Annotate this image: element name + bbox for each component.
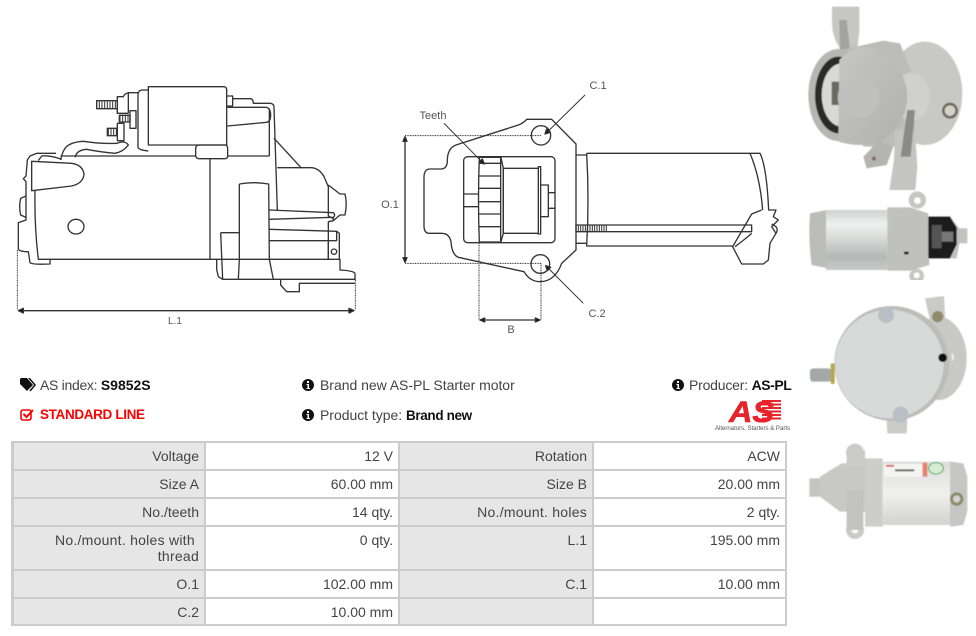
photo: starter front end view: [808, 6, 963, 190]
row: C.2: [14, 599, 785, 624]
info: producer: Producer: AS-PL: [689, 377, 791, 393]
icon: info: [672, 379, 684, 391]
diagram: starter motor front view: [381, 80, 779, 336]
icon: info: [302, 409, 314, 421]
row: threaded holes / L.1: [14, 527, 785, 569]
row: size A / size B: 60.00 mm: [331, 476, 393, 492]
row: voltage / rotation: [14, 443, 785, 469]
icon: info: [302, 379, 314, 391]
row: size A / size B: Size A: [159, 476, 199, 492]
info: brand new: Brand new AS-PL Starter motor: [320, 377, 515, 393]
diagram: starter motor front view: B: [507, 324, 515, 336]
row: O.1 / C.1: [14, 571, 785, 597]
diagram: starter motor front view: C.1: [589, 80, 607, 92]
row: voltage / rotation: Voltage: [152, 448, 199, 464]
row: teeth / mounting holes: No./mount. holes: [477, 504, 587, 520]
row: size A / size B: Size B: [547, 476, 587, 492]
row: threaded holes / L.1: thread: [158, 548, 199, 564]
diagram: starter motor side view: L.1: [168, 316, 182, 327]
row: O.1 / C.1: 10.00 mm: [718, 576, 780, 592]
row: threaded holes / L.1: L.1: [568, 532, 587, 548]
specification table: [11, 441, 787, 626]
photo: starter side view with label: [808, 443, 968, 540]
logo: AS: [715, 400, 790, 432]
row: teeth / mounting holes: 2 qty.: [747, 504, 780, 520]
icon: checkbox: [20, 409, 34, 421]
diagram: starter motor front view: Teeth: [420, 110, 446, 122]
info: standard line: STANDARD LINE: [40, 407, 145, 422]
row: teeth / mounting holes: [14, 499, 785, 525]
row: teeth / mounting holes: No./teeth: [142, 504, 199, 520]
row: voltage / rotation: ACW: [747, 448, 780, 464]
diagram: starter motor front view: C.2: [588, 308, 606, 320]
photo: starter rear end view: [810, 296, 968, 434]
photo: starter top view: [808, 191, 968, 280]
logo: AS: Alternators, Starters & Parts: [715, 426, 790, 432]
info: product type: Product type: Brand new: [320, 407, 472, 423]
row: O.1 / C.1: C.1: [565, 576, 587, 592]
row: teeth / mounting holes: 14 qty.: [352, 504, 393, 520]
row: C.2: 10.00 mm: [331, 604, 393, 620]
row: voltage / rotation: 12 V: [364, 448, 393, 464]
row: size A / size B: [14, 471, 785, 497]
row: threaded holes / L.1: 195.00 mm: [710, 532, 780, 548]
info: AS index: AS index: S9852S: [40, 377, 151, 393]
diagram: starter motor side view: [16, 86, 356, 327]
row: O.1 / C.1: O.1: [176, 576, 199, 592]
diagram: starter motor front view: O.1: [381, 199, 399, 211]
row: voltage / rotation: Rotation: [535, 448, 587, 464]
icon: tags: [20, 378, 36, 392]
row: size A / size B: 20.00 mm: [718, 476, 780, 492]
row: threaded holes / L.1: 0 qty.: [360, 532, 393, 548]
row: O.1 / C.1: 102.00 mm: [323, 576, 393, 592]
row: threaded holes / L.1: No./mount. holes with: [55, 532, 195, 548]
row: C.2: C.2: [177, 604, 199, 620]
